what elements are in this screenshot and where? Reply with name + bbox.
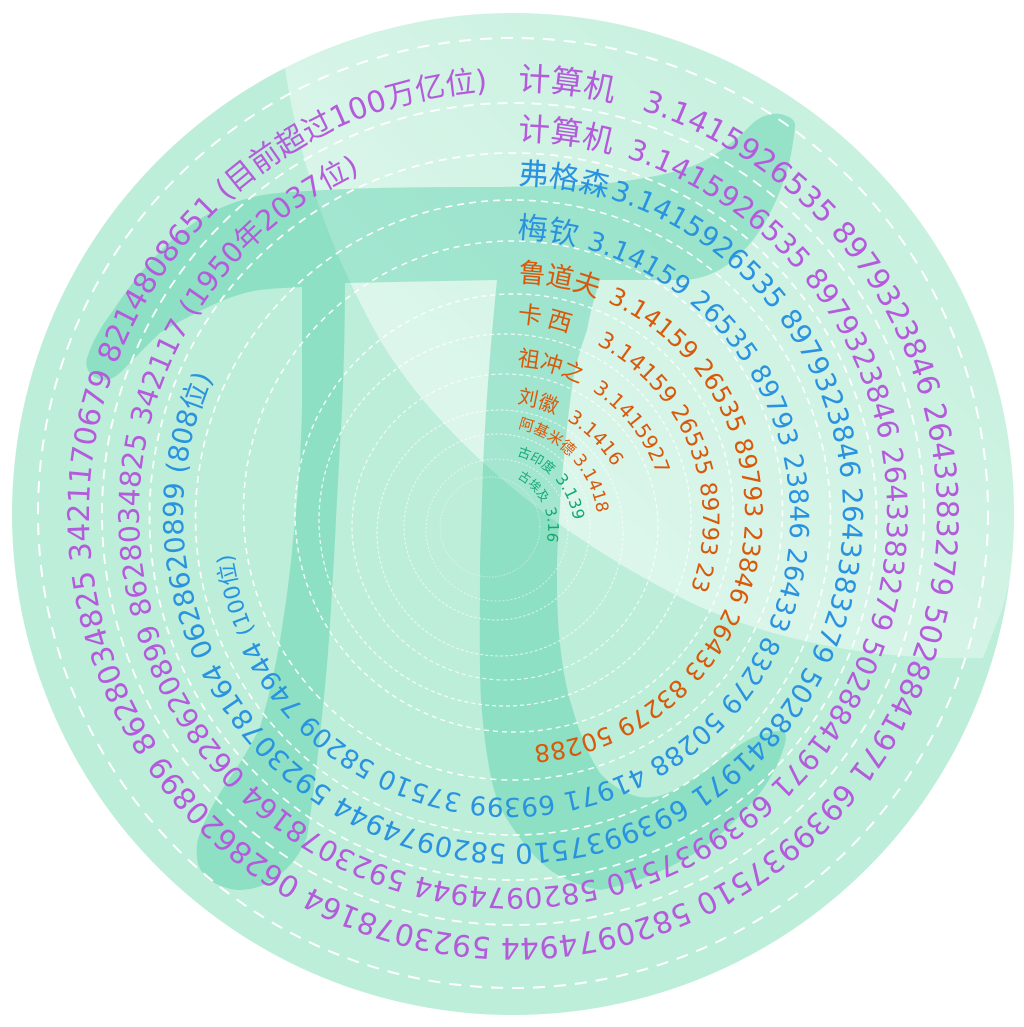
ring: computer, 1950, 2037 digits (118, 114, 908, 910)
label: computer: 计算机 (520, 64, 614, 104)
digits: 3.139 (556, 473, 584, 518)
ring: Archimedes (518, 416, 609, 512)
digits: 3.1416 (568, 410, 624, 464)
label: Liu Hui: 刘徽 (518, 388, 560, 415)
ring: al-Kashi (519, 303, 720, 592)
digits: 3.1415926535 8979323846 2643383279 5028841971 6939937510 5820974944 5923078164 0628620899 (808位) (162, 180, 864, 864)
digits: 3.16 (545, 507, 559, 542)
digits: 3.14159 26535 89793 23846 26433 83279 50288 (536, 287, 764, 762)
label: Ferguson: 弗格森 (519, 159, 609, 198)
digits: 3.1415926535 8979323846 2643383279 5028841971 6939937510 5820974944 5923078164 0628620899 8628034825 342117 (1950年2037位) (118, 139, 908, 910)
label: ancient India: 古印度 (518, 447, 556, 474)
ring: ancient India (518, 447, 584, 518)
translucent light overlay (285, 0, 1024, 658)
ring: computer, over 1 trillion digits (66, 64, 960, 960)
label: Machin: 梅钦 (518, 212, 579, 248)
digits: 3.1418 (574, 454, 609, 512)
pi symbol (86, 114, 795, 890)
digits: 3.1415927 (594, 380, 670, 468)
ring: Ferguson, 808 digits (162, 159, 864, 864)
label: Zu Chongzhi: 祖冲之 (518, 348, 583, 384)
digits: 3.14159 26535 89793 23846 26433 83279 50288 41971 69399 37510 58209 74944 (100位) (216, 231, 810, 818)
label: al-Kashi: 卡 西 (519, 303, 573, 334)
digits: 3.1415926535 8979323846 2643383279 5028841971 6939937510 5820974944 5923078164 0628620899 8628034825 3421170679 8214808651 (目前超过100万亿位) (66, 68, 960, 960)
label: computer: 计算机 (520, 114, 612, 154)
label: Ludolph: 鲁道夫 (520, 260, 600, 299)
digits: 3.14159 26535 89793 23 (598, 331, 720, 592)
label: Archimedes: 阿基米德 (518, 416, 577, 456)
ring: Zu Chongzhi (518, 348, 670, 468)
ring: Liu Hui (518, 388, 624, 464)
ring: ancient Egypt (518, 471, 559, 542)
ring: Machin, 100 digits (216, 212, 810, 818)
ring: Ludolph (520, 260, 764, 762)
label: ancient Egypt: 古埃及 (518, 471, 548, 502)
